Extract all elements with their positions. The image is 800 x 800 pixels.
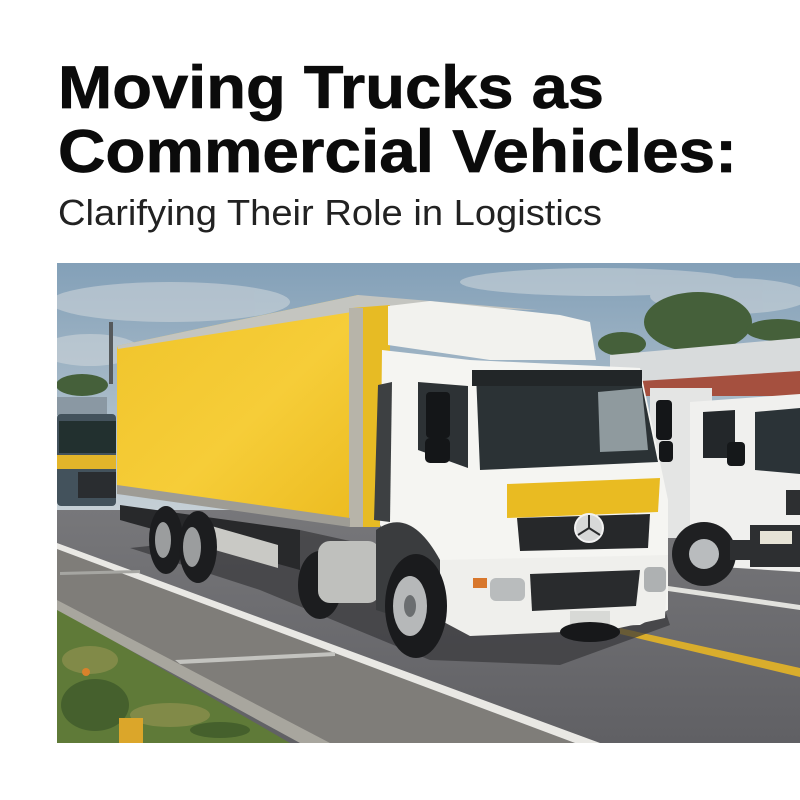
far front wheel bbox=[560, 622, 620, 642]
front wheel bbox=[385, 554, 447, 658]
photo: moving truck on a road bbox=[40, 263, 800, 743]
windscreen bbox=[476, 386, 658, 470]
white cab bbox=[374, 301, 673, 636]
utility pole bbox=[109, 322, 113, 384]
ground shadow bbox=[130, 530, 670, 665]
title: Commercial Vehicles: bbox=[58, 118, 737, 185]
clouds bbox=[40, 268, 800, 366]
sky bbox=[57, 263, 800, 513]
front wheel arch bbox=[376, 522, 440, 612]
grille bbox=[517, 514, 650, 551]
left background truck bbox=[57, 397, 116, 506]
kerb bbox=[57, 600, 330, 743]
yellow grille band bbox=[507, 478, 660, 518]
warehouse bbox=[610, 338, 800, 396]
chassis and rear wheels bbox=[120, 505, 380, 619]
bumper bbox=[445, 612, 666, 636]
grass verge bbox=[57, 608, 290, 743]
road markings bbox=[57, 543, 800, 743]
title bbox=[58, 54, 737, 185]
background trees bbox=[56, 292, 800, 396]
subtitle: Clarifying Their Role in Logistics bbox=[58, 192, 602, 233]
yellow post bbox=[119, 718, 143, 743]
road bbox=[57, 510, 800, 743]
side window and mirror bbox=[418, 382, 468, 468]
title: Moving Trucks as bbox=[58, 54, 604, 121]
right background truck bbox=[650, 388, 800, 586]
yellow cargo box bbox=[117, 295, 538, 527]
road shoulder bbox=[57, 549, 575, 743]
